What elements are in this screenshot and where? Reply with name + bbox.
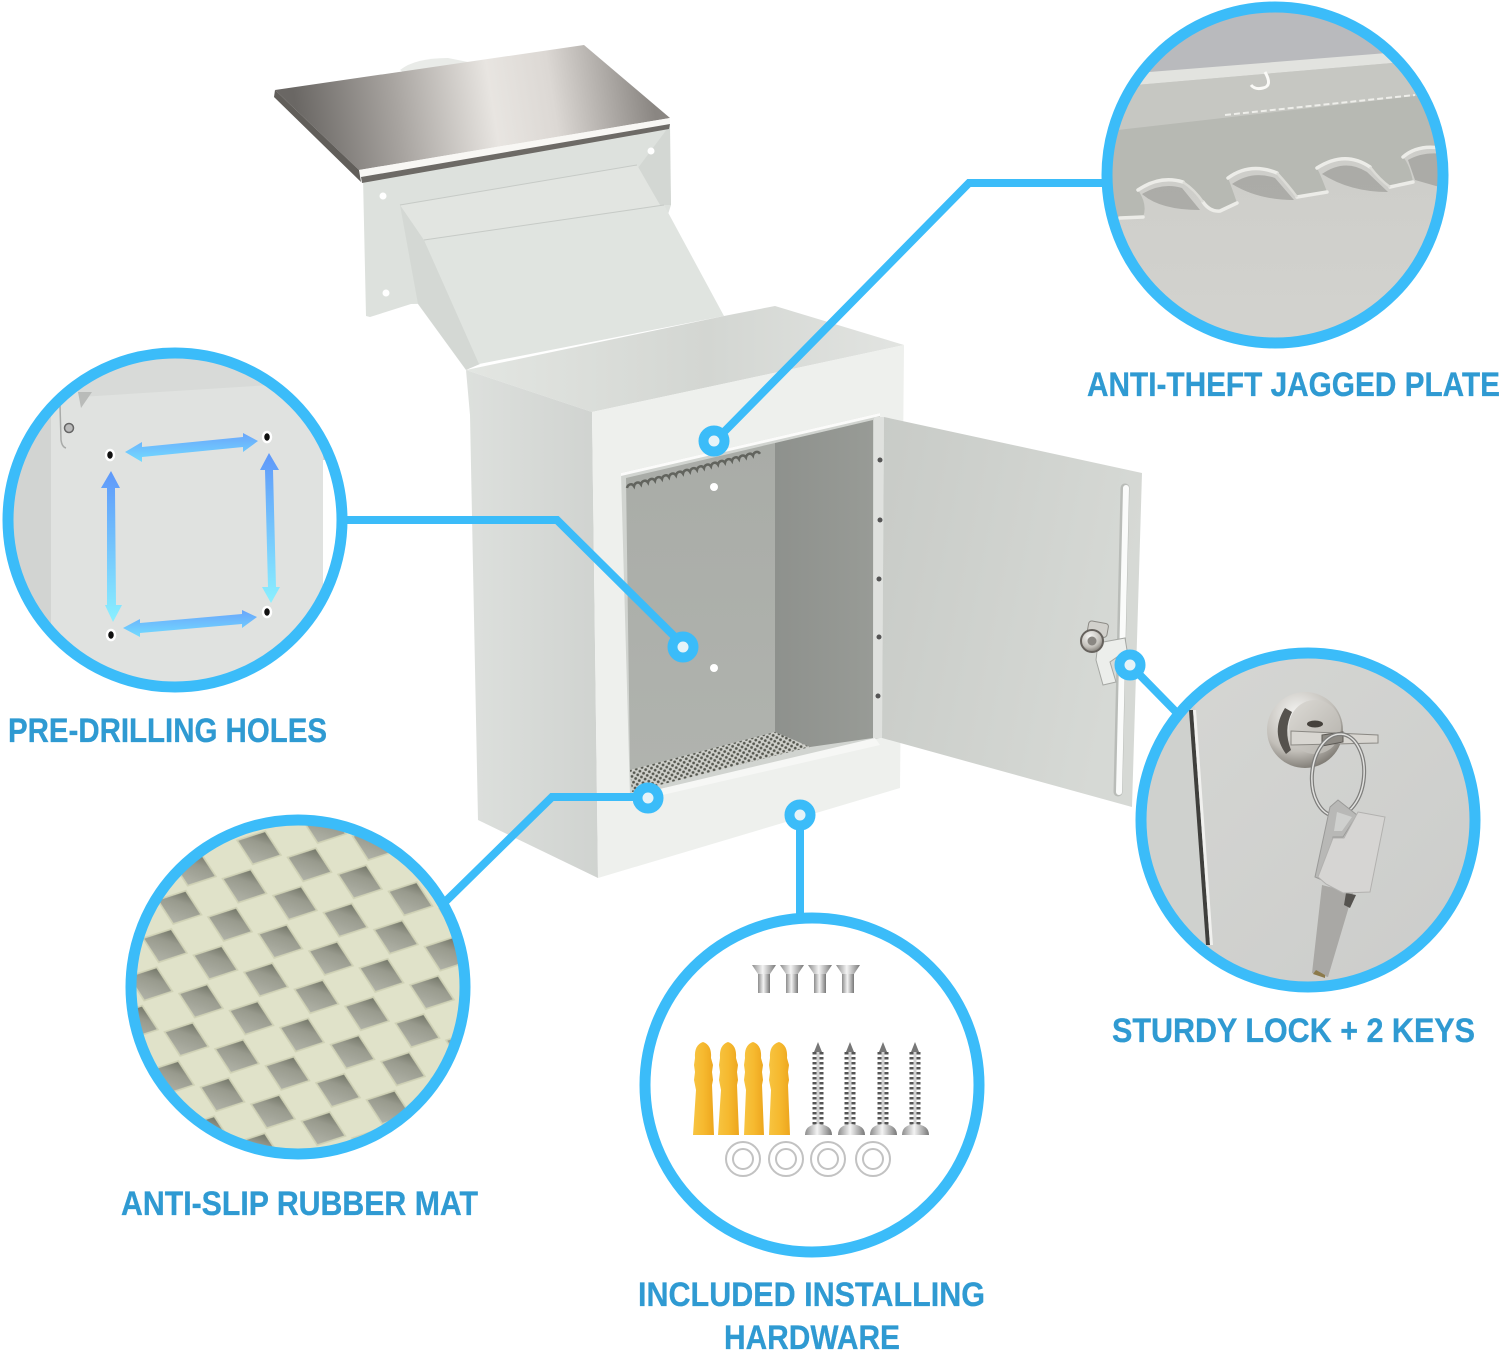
open door	[882, 417, 1142, 807]
arrow top	[125, 433, 258, 462]
panel: jagged plate	[1100, 0, 1450, 350]
chute	[400, 165, 724, 370]
keys	[1312, 800, 1385, 978]
hinge strip	[873, 417, 884, 738]
line: lock	[1133, 668, 1180, 716]
box top	[466, 306, 904, 412]
stainless steel lid	[274, 45, 670, 183]
door handle strip	[1118, 488, 1126, 792]
yellow wall anchors	[693, 1042, 790, 1135]
arrow right	[260, 453, 280, 603]
label: included installing hardware	[638, 1276, 985, 1352]
box left side	[466, 370, 598, 878]
line: hardware	[796, 818, 804, 916]
machine screws	[752, 965, 860, 993]
arrow left	[101, 471, 122, 622]
callout lines	[345, 183, 1180, 916]
wood screws	[805, 1042, 929, 1135]
label: pre-drilling holes: PRE-DRILLING HOLES	[8, 712, 327, 750]
panel: installing hardware	[645, 918, 979, 1252]
door lock	[1081, 621, 1127, 685]
label: anti-slip rubber mat: ANTI-SLIP RUBBER MAT	[121, 1185, 478, 1223]
mailbox product illustration	[274, 45, 1142, 878]
line: rubber mat	[445, 797, 640, 902]
line: jagged plate	[720, 183, 1108, 436]
panel: lock and keys	[1130, 645, 1490, 1000]
perforated mat	[630, 732, 810, 792]
panel: pre-drilling holes	[0, 345, 353, 700]
jagged edge	[627, 452, 760, 488]
mounting hole markers	[106, 432, 271, 640]
key ring	[1309, 732, 1367, 818]
line: pre-drilling holes	[345, 520, 678, 640]
key cylinder	[1267, 692, 1378, 768]
washers	[726, 1142, 890, 1176]
panel: rubber mat	[131, 820, 465, 1154]
wall plate	[363, 125, 671, 317]
callout anchor dots	[638, 430, 1140, 826]
box front frame	[592, 345, 904, 878]
arrow bottom	[123, 610, 257, 637]
opening and interior	[621, 413, 880, 802]
label: included installing hardware: INCLUDED INSTALLING	[638, 1276, 985, 1314]
